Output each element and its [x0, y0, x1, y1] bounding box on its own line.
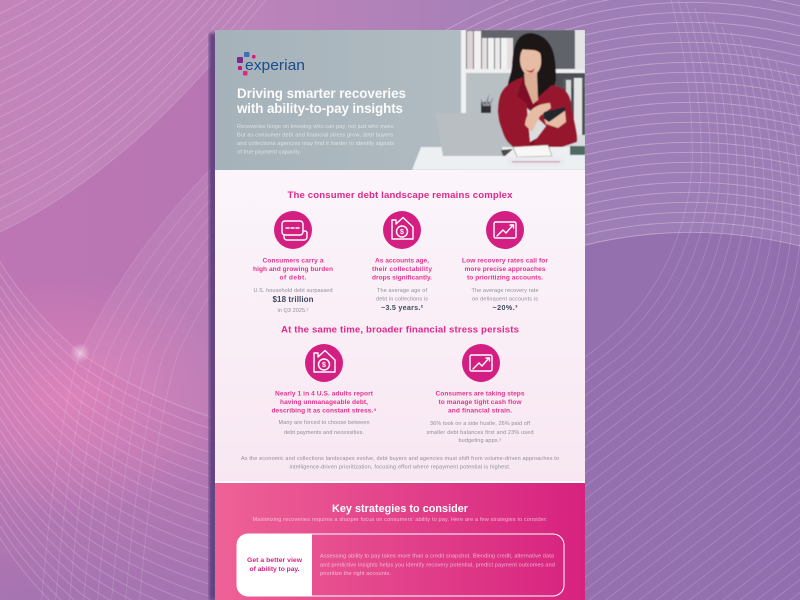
column: taking steps [426, 390, 534, 444]
hero photo: woman at laptop with phone [412, 30, 585, 170]
column: burden of debt: U.S. household debt surpassed [254, 288, 332, 294]
column: taking steps: to manage tight cash flow [438, 399, 522, 406]
intro text: and collections agencies may find it harder to identify signals [237, 141, 394, 147]
column: accounts age: The average age of [377, 288, 427, 294]
card: better view of ability to pay [237, 534, 564, 596]
icon: house with dollar [383, 211, 421, 249]
strategies heading: Key strategies to consider [332, 503, 469, 515]
title [236, 86, 406, 116]
icon: credit cards [274, 211, 312, 249]
summary paragraph [241, 456, 559, 470]
icon: house with dollar: $ [400, 229, 404, 236]
heading: financial stress: At the same time, broader financial stress persists [281, 324, 519, 336]
column: taking steps: and financial strain. [448, 408, 512, 414]
column: low recovery rates: to prioritizing accounts. [467, 274, 543, 282]
column: unmanageable debt [272, 390, 376, 436]
column: burden of debt: Consumers carry a [262, 258, 324, 264]
heading: consumer debt landscape: The consumer debt landscape remains complex [288, 190, 513, 201]
page background panel [215, 170, 585, 481]
column: burden of debt: of debt. [280, 274, 307, 282]
column: low recovery rates: more precise approaches [464, 266, 546, 273]
icon: chart trending up [486, 211, 524, 249]
title: with ability-to-pay insights [236, 101, 403, 116]
column: unmanageable debt: debt payments and necessities. [284, 430, 364, 436]
column: burden of debt: high and growing burden [253, 266, 333, 273]
column: low recovery rates [462, 258, 548, 312]
hair [508, 33, 556, 100]
title: Driving smarter recoveries [237, 86, 406, 101]
icon: chart trending up 2 [462, 344, 500, 382]
column: low recovery rates: Low recovery rates call for [462, 258, 548, 264]
column: accounts age: their collectability [372, 266, 432, 273]
column: unmanageable debt: having unmanageable debt, [280, 399, 368, 406]
column: burden of debt: in Q3 2025.¹ [278, 308, 309, 314]
intro text: of true payment capacity. [237, 150, 301, 156]
card: better view of ability to pay: Assessing ability to pay takes more than a credit snapshot. Blending credit, alternative data [320, 554, 555, 560]
page shadow [209, 33, 217, 600]
column: unmanageable debt: Nearly 1 in 4 U.S. adults report [275, 390, 374, 398]
column: low recovery rates: ~20%.³ [492, 303, 518, 312]
card: better view of ability to pay: of ability to pay. [250, 566, 300, 573]
column: low recovery rates: The average recovery rate [472, 288, 538, 294]
column: accounts age: debt in collections is [376, 296, 428, 302]
laptop [435, 113, 503, 156]
panel: key strategies [215, 483, 585, 600]
papers on desk [513, 145, 552, 157]
logo: experian [237, 52, 305, 76]
logo: experian: experian [245, 58, 305, 74]
summary paragraph: As the economic and collections landscapes evolve, debt buyers and agencies must shift from volume-driven approaches to [241, 456, 559, 462]
column: accounts age: As accounts age, [375, 258, 429, 264]
column: accounts age: drops significantly. [372, 274, 432, 282]
icon: house with dollar 2: $ [322, 362, 326, 369]
intro text: But as consumer debt and financial stress grow, debt buyers [237, 132, 393, 138]
hands and phone [525, 103, 551, 132]
column: unmanageable debt: Many are forced to choose between [278, 420, 370, 426]
blouse [527, 108, 546, 142]
card: better view of ability to pay: Get a better view [247, 557, 303, 564]
icon: house with dollar 2 [305, 344, 343, 382]
column: burden of debt [253, 258, 333, 314]
column: burden of debt: $18 trillion [272, 295, 314, 304]
intro text: Recoveries hinge on knowing who can pay, not just who owes. [237, 124, 395, 130]
summary paragraph: intelligence-driven prioritization, focusing effort where repayment potential is highest. [290, 464, 511, 470]
column: taking steps: budgeting apps.⁵ [458, 437, 502, 444]
blazer [498, 77, 577, 148]
desk [412, 147, 585, 170]
column: taking steps: 36% took on a side hustle, 26% paid off [430, 421, 530, 427]
column: accounts age: ~3.5 years.² [381, 303, 424, 312]
column: taking steps: smaller debt balances first and 23% used [426, 430, 534, 436]
column: accounts age [372, 258, 432, 312]
column: taking steps: Consumers are taking steps [436, 390, 525, 398]
column: unmanageable debt: describing it as constant stress.⁴ [272, 408, 376, 414]
hero panel [215, 30, 585, 170]
column: low recovery rates: on delinquent accounts is [472, 296, 538, 302]
card: better view of ability to pay: prioritize the right accounts. [320, 571, 391, 577]
intro text [237, 124, 395, 156]
strategies subheading: Maximizing recoveries requires a sharper focus on consumers' ability to pay. Here are a few strategies to consider: [252, 517, 548, 523]
face and neck [520, 45, 541, 77]
card: better view of ability to pay: and predictive insights helps you identify recovery potential, predict payment outcomes and [320, 562, 555, 568]
